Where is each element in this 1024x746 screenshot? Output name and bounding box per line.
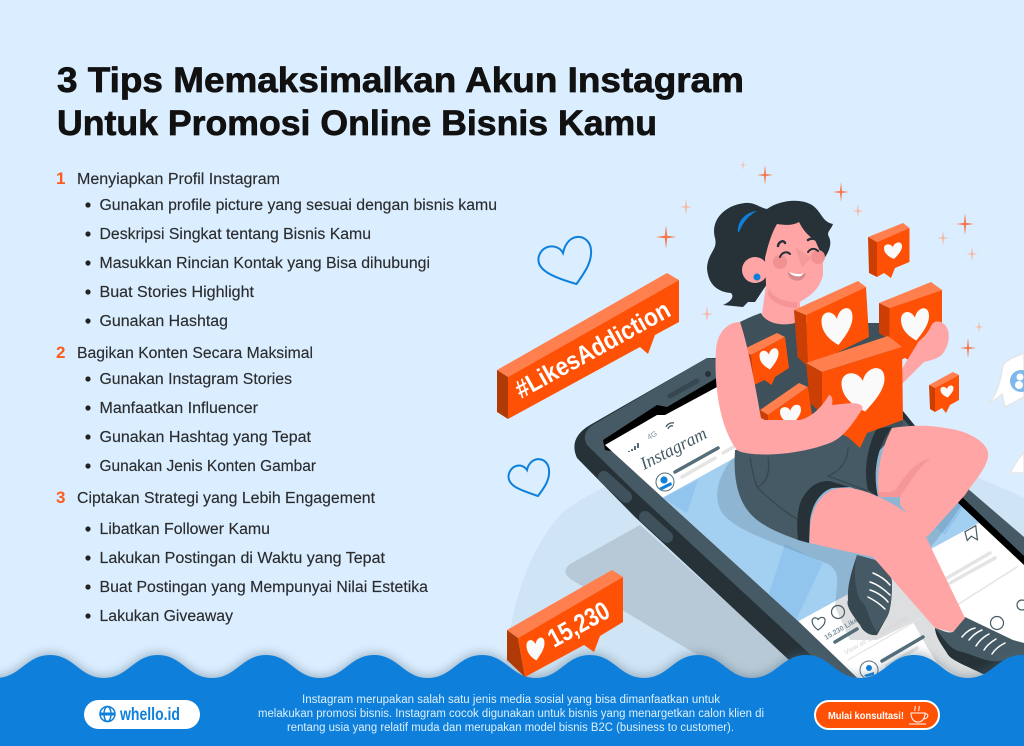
footer description: rentang usia yang relatif muda dan merupakan model bisnis B2C (business to customer). — [287, 722, 734, 734]
ear — [742, 257, 768, 283]
likes counter badge: 15,230 — [542, 595, 615, 653]
status bar: 4G — [646, 429, 659, 442]
section 3: Lakukan Giveaway — [100, 608, 233, 625]
nose — [795, 247, 812, 267]
section 1: Buat Stories Highlight — [100, 284, 255, 301]
section 3: Buat Postingan yang Mempunyai Nilai Estetika — [100, 579, 428, 596]
background arch — [505, 445, 1024, 690]
footer description — [258, 694, 764, 734]
instagram wordmark: Instagram — [636, 423, 710, 474]
whello logo pill — [84, 700, 200, 729]
likes counter badge — [507, 570, 623, 677]
section 3: 3 — [56, 488, 65, 507]
mouth — [788, 272, 806, 281]
post likes text: 15.230 Likes — [824, 615, 863, 642]
section 2: 2 — [56, 343, 65, 362]
status bar — [629, 423, 674, 452]
phone — [574, 358, 1024, 678]
consult button: Mulai konsultasi! — [828, 710, 904, 722]
tips list — [56, 169, 497, 625]
heart badge: front large — [806, 336, 903, 448]
consult button — [815, 701, 939, 729]
side buttons — [604, 477, 667, 537]
figure shadow — [717, 446, 984, 678]
raised thigh — [878, 426, 988, 537]
wave footer band — [0, 655, 1024, 746]
earring — [754, 274, 760, 280]
whello logo pill: whello.id — [119, 704, 180, 724]
section 2 — [56, 343, 316, 475]
hair — [707, 201, 833, 307]
icon: globe — [100, 706, 115, 722]
post comments text: View all 235 comments — [844, 614, 910, 657]
section 3 — [56, 488, 428, 625]
speech bubbles at right edge — [990, 353, 1024, 473]
shorts left hem — [797, 481, 850, 543]
footer description: melakukan promosi bisnis. Instagram cocok digunakan untuk bisnis yang menargetkan calon klien di — [258, 708, 764, 720]
shorts right hem — [866, 427, 892, 497]
heart badge: top right — [868, 223, 910, 278]
phone bezel — [585, 358, 1024, 695]
section 1: Gunakan profile picture yang sesuai dengan bisnis kamu — [100, 197, 497, 214]
section 1: Gunakan Hashtag — [100, 313, 228, 330]
woman character — [707, 201, 1024, 674]
title: 3 Tips Memaksimalkan Akun Instagram — [57, 61, 744, 100]
section 3: Lakukan Postingan di Waktu yang Tepat — [100, 550, 386, 567]
shirt — [740, 313, 903, 462]
shorts — [735, 425, 900, 540]
section 1: Menyiapkan Profil Instagram — [77, 171, 280, 188]
neck and face — [762, 222, 823, 335]
sparkles — [656, 160, 984, 358]
shorts seams — [750, 447, 868, 519]
phone body — [574, 358, 1024, 695]
heart badge: center large back — [794, 281, 869, 367]
title — [57, 61, 744, 143]
title: Untuk Promosi Online Bisnis Kamu — [57, 104, 657, 143]
black screen edge — [603, 342, 1024, 575]
dangling shoe — [848, 555, 892, 635]
section 2: Gunakan Instagram Stories — [100, 371, 292, 388]
post icons — [812, 526, 1024, 630]
thigh shadow — [877, 458, 931, 497]
lower post lines — [835, 553, 1017, 666]
eyes and brows — [778, 239, 818, 257]
photo area — [662, 444, 980, 622]
section 2: Bagikan Konten Secara Maksimal — [77, 345, 313, 362]
screen — [605, 350, 1024, 700]
section 3: Ciptakan Strategi yang Lebih Engagement — [77, 490, 376, 507]
screen content — [662, 444, 1024, 678]
heart badge: small right — [929, 372, 959, 413]
heart badge: lower small — [760, 383, 815, 435]
speaker and camera — [670, 371, 711, 396]
photo light bands — [663, 480, 975, 620]
foot shoe — [935, 617, 1024, 674]
front leg — [810, 488, 965, 632]
avatar top — [656, 473, 674, 491]
section 1 — [56, 169, 497, 330]
heart badge: small left — [742, 333, 789, 385]
icon: outline heart top — [538, 237, 591, 284]
arm and hand — [716, 322, 863, 454]
cheeks — [773, 250, 825, 269]
avatar bottom — [860, 661, 878, 679]
likes addiction badge: #LikesAddiction — [510, 296, 675, 404]
section 1: Masukkan Rincian Kontak yang Bisa dihubungi — [100, 255, 430, 272]
footer description: Instagram merupakan salah satu jenis media sosial yang bisa dimanfaatkan untuk — [302, 694, 720, 706]
wave shadow — [0, 653, 1024, 746]
header lines — [675, 446, 735, 477]
chin shadow — [768, 288, 797, 308]
phone ground shadow — [565, 525, 830, 695]
section 2: Gunakan Jenis Konten Gambar — [100, 458, 316, 475]
section 1: 1 — [56, 169, 65, 188]
section 1: Deskripsi Singkat tentang Bisnis Kamu — [100, 226, 371, 243]
section 2: Gunakan Hashtag yang Tepat — [100, 429, 312, 446]
right hand — [898, 321, 949, 388]
section 2: Manfaatkan Influencer — [100, 400, 258, 417]
icon: coffee cup — [909, 706, 928, 724]
icon: outline heart bottom — [508, 459, 549, 496]
section 3: Libatkan Follower Kamu — [100, 521, 270, 538]
hair band — [738, 211, 757, 232]
heart badge: right — [879, 282, 942, 365]
